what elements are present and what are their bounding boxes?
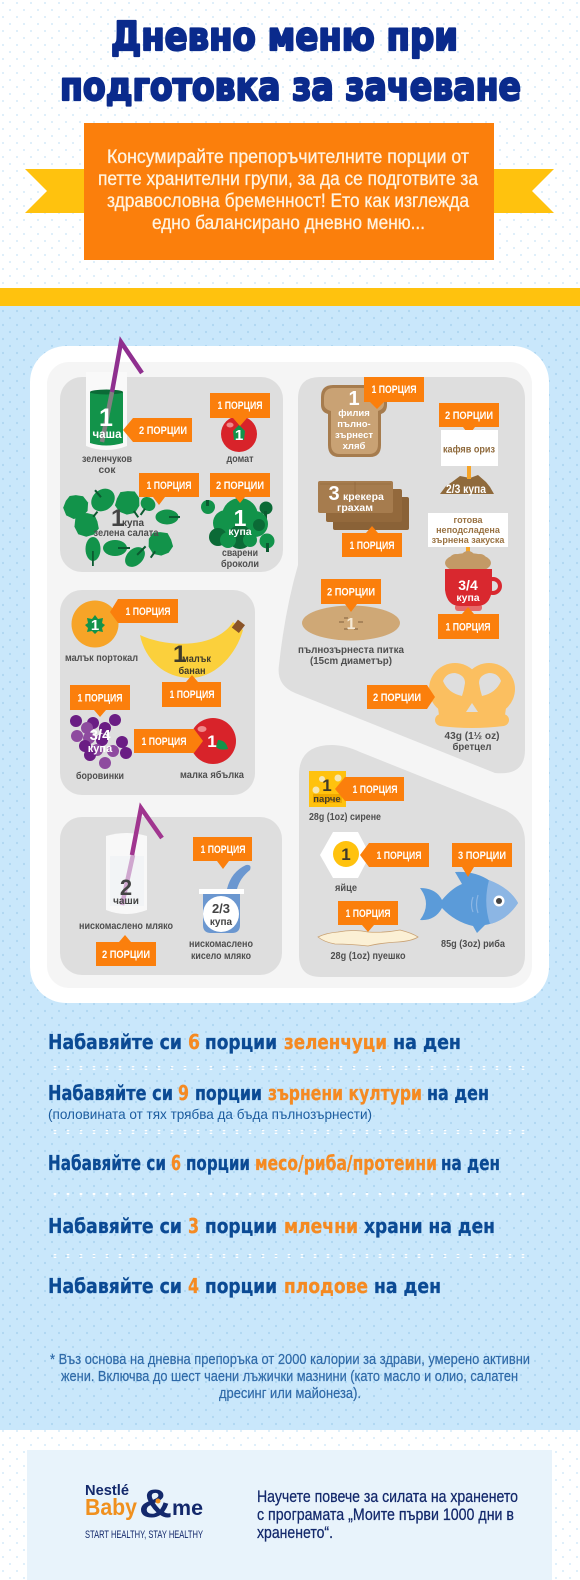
label: small apple: малка ябълка <box>180 769 244 781</box>
icon: cheese slice <box>309 771 346 807</box>
row: fruit: порции <box>205 1274 277 1298</box>
row: fruit: 4 <box>188 1274 199 1298</box>
icon: cereal cup: купа <box>456 592 480 604</box>
row: fruit <box>48 1274 441 1298</box>
icon: apple: 1 <box>207 732 217 751</box>
icon: graham crackers: 3 <box>328 483 340 505</box>
icon: lettuce leaves: зелена салата <box>94 528 159 539</box>
icon: yogurt cup: 2/3 <box>212 901 230 916</box>
icon: bread slice: пълно- <box>337 419 371 430</box>
row: protein: порции <box>186 1151 250 1175</box>
callout: 2 portions milk: 2 ПОРЦИИ <box>102 949 150 961</box>
icon: egg <box>320 832 370 878</box>
callout: 1 portion yogurt <box>193 837 252 869</box>
row: vegetables: на ден <box>393 1030 461 1054</box>
callout: 1 portion lettuce: 1 ПОРЦИЯ <box>146 480 192 492</box>
label: fish: 85g (3oz) риба <box>441 938 505 950</box>
label: egg: яйце <box>335 883 357 894</box>
label: vegetable juice <box>82 454 132 476</box>
icon: brown rice: кафяв ориз <box>443 444 495 456</box>
icon: bread slice: зърнест <box>335 430 373 441</box>
row: grains: порции <box>195 1081 262 1105</box>
callout: 1 portion tomato: 1 ПОРЦИЯ <box>218 400 263 412</box>
icon: vegetable juice: 1 <box>99 404 113 432</box>
row: protein: Набавяйте си <box>48 1151 166 1175</box>
icon: blueberries: 3/4 <box>90 727 111 744</box>
icon: bread slice: 1 <box>348 388 360 410</box>
callout: 1 portion tomato <box>210 393 270 426</box>
callout: 1 portion egg: 1 ПОРЦИЯ <box>376 850 422 862</box>
icon: lettuce leaves <box>59 482 180 571</box>
call to action text: Научете повече за силата на храненето <box>257 1487 518 1506</box>
icon: whole-grain tortilla: 1 <box>347 616 356 633</box>
intro banner: Консумирайте препоръчителните порции от <box>107 147 469 168</box>
icon: cheese slice: парче <box>313 794 341 805</box>
call to action text: храненето“. <box>257 1523 333 1542</box>
logo: Nestlé Baby & me: START HEALTHY, STAY HEALTHY <box>85 1529 203 1541</box>
logo: Nestlé Baby & me: & <box>139 1482 172 1526</box>
row: grains: (половината от тях трябва да бъда пълнозърнести) <box>48 1106 372 1122</box>
callout: 2 portions milk <box>96 935 156 966</box>
icon: milk glass: чаши <box>113 896 139 907</box>
label: tortilla <box>298 645 404 667</box>
row: grains: 9 <box>178 1081 189 1105</box>
row: dairy: 3 <box>188 1214 199 1238</box>
icon: broccoli: купа <box>228 526 252 538</box>
row: protein: месо/риба/протеини <box>255 1151 437 1175</box>
row: vegetables: порции <box>205 1030 277 1054</box>
icon: whole-grain tortilla <box>302 606 400 640</box>
icon: cereal cup: 3/4 <box>458 577 478 593</box>
icon: orange: 1 <box>91 617 99 634</box>
icon: broccoli <box>201 498 274 552</box>
icon: graham crackers: грахам <box>337 502 373 514</box>
label: low-fat yogurt: нискомаслено <box>189 939 253 950</box>
row: dairy: храни на ден <box>364 1214 495 1238</box>
row: protein <box>48 1151 500 1175</box>
logo: Nestlé Baby & me: Nestlé <box>85 1482 129 1499</box>
icon: milk glass: 2 <box>120 875 132 900</box>
icon: lettuce leaves: купа <box>122 517 144 529</box>
icon: bread slice: хляб <box>343 441 365 452</box>
icon: broccoli: 1 <box>234 505 247 531</box>
icon: vegetable juice: чаша <box>92 429 122 441</box>
logo: Nestlé Baby & me: Baby <box>85 1494 137 1520</box>
label: broccoli: броколи <box>221 558 259 570</box>
footnote <box>50 1352 530 1402</box>
panel: vegetables <box>59 342 283 572</box>
row: dairy: млечни <box>284 1214 358 1238</box>
row: protein: 6 <box>171 1151 181 1175</box>
icon: milk glass <box>106 808 162 914</box>
call to action text: с програмата „Моите първи 1000 дни в <box>257 1505 514 1524</box>
icon: cereal cup <box>428 513 508 611</box>
callout: 2 portions tortilla <box>321 579 381 612</box>
footnote: жени. Включва до шест чаени лъжички мазнини (като масло и олио, салатен <box>61 1369 518 1385</box>
callout: 1 portion crackers: 1 ПОРЦИЯ <box>350 540 395 552</box>
icon: cereal cup: неподсладена <box>436 525 501 535</box>
intro banner: петте хранителни групи, за да се подготвите за <box>98 169 478 190</box>
row: protein: на ден <box>441 1151 500 1175</box>
callout: 2 portions broccoli <box>210 473 270 503</box>
plate tray <box>30 342 549 1003</box>
icon: yogurt cup: купа <box>210 917 233 928</box>
row: vegetables: зеленчуци <box>284 1030 387 1054</box>
icon: brown rice <box>440 430 498 496</box>
callout: 1 portion bread <box>364 377 424 409</box>
label: blueberries: боровинки <box>76 770 124 782</box>
callout: 2 portions pretzel <box>367 685 435 709</box>
footnote: * Въз основа на дневна препоръка от 2000 калории за здрави, умерено активни <box>50 1352 530 1368</box>
callout: 1 portion bread: 1 ПОРЦИЯ <box>372 384 417 396</box>
icon: bread slice: филия <box>338 408 370 419</box>
icon: apple <box>190 718 236 764</box>
label: cheese: 28g (1oz) сирене <box>309 812 381 823</box>
icon: graham crackers: крекера <box>343 491 384 503</box>
label: tomato: домат <box>226 454 254 465</box>
callout: 3 portions fish: 3 ПОРЦИИ <box>458 850 506 862</box>
callout: 1 portion banana <box>162 675 221 707</box>
intro banner: едно балансирано дневно меню... <box>152 213 425 234</box>
label: low-fat milk: нискомаслено мляко <box>79 921 173 932</box>
title: Дневно меню при <box>111 15 458 60</box>
logo: Nestlé Baby & me: me <box>172 1497 203 1520</box>
icon: banana: малък <box>182 654 212 665</box>
servings summary <box>48 1030 531 1298</box>
row: grains: Набавяйте си <box>48 1081 173 1105</box>
callout: 2 portions rice <box>439 403 499 435</box>
callout: 1 portion cheese <box>335 777 404 801</box>
callout: 1 portion banana: 1 ПОРЦИЯ <box>170 689 215 701</box>
icon: egg: 1 <box>341 845 351 864</box>
callout: 1 portion cheese: 1 ПОРЦИЯ <box>352 784 398 796</box>
intro banner <box>25 123 554 260</box>
label: pretzel: бретцел <box>452 741 492 753</box>
row: grains: зърнени култури <box>268 1081 422 1105</box>
icon: orange <box>72 600 118 648</box>
icon: fish <box>420 872 518 933</box>
row: grains: на ден <box>427 1081 489 1105</box>
icon: pretzel <box>429 663 515 722</box>
panel: fruit <box>60 590 255 795</box>
icon: tomato <box>221 416 257 452</box>
label: tortilla: (15cm диаметър) <box>310 656 392 667</box>
callout: 1 portion orange <box>110 599 178 623</box>
call to action text <box>257 1487 518 1542</box>
panel: grains <box>279 377 525 773</box>
intro banner: здравословна бременност! Ето как изглежда <box>107 191 469 212</box>
callout: 1 portion yogurt: 1 ПОРЦИЯ <box>200 844 246 856</box>
row: dairy: Набавяйте си <box>48 1214 182 1238</box>
icon: vegetable juice <box>86 342 142 450</box>
callout: 2 portions juice: 2 ПОРЦИИ <box>139 425 187 437</box>
row: grains <box>48 1081 489 1122</box>
label: vegetable juice: сок <box>98 465 117 476</box>
callout: 1 portion egg <box>360 843 429 867</box>
footnote: дресинг или майонеза). <box>219 1386 361 1402</box>
panel: protein <box>299 745 525 977</box>
callout: 1 portion apple <box>134 729 203 753</box>
callout: 2 portions tortilla: 2 ПОРЦИИ <box>327 586 375 598</box>
callout: 2 portions juice <box>123 418 192 442</box>
callout: 1 portion blueberries: 1 ПОРЦИЯ <box>78 692 123 704</box>
icon: cereal cup: готова <box>453 515 484 525</box>
row: fruit: на ден <box>374 1274 441 1298</box>
label: broccoli: сварени <box>222 548 258 559</box>
icon: blueberries <box>70 714 132 769</box>
callout: 1 portion apple: 1 ПОРЦИЯ <box>142 736 187 748</box>
callout: 3 portions fish <box>452 843 512 877</box>
icon: graham crackers <box>318 481 409 530</box>
label: broccoli <box>221 548 259 570</box>
label: low-fat yogurt: кисело мляко <box>191 951 251 962</box>
icon: turkey slice <box>318 930 418 946</box>
icon: banana <box>140 620 245 678</box>
label: low-fat yogurt <box>189 939 253 962</box>
icon: tomato: 1 <box>235 427 243 444</box>
row: vegetables <box>48 1030 461 1054</box>
callout: 2 portions broccoli: 2 ПОРЦИИ <box>216 480 264 492</box>
callout: 1 portion crackers <box>342 526 402 557</box>
icon: bread slice <box>321 385 387 457</box>
callout: 1 portion turkey: 1 ПОРЦИЯ <box>346 908 391 920</box>
label: pretzel <box>444 731 500 753</box>
panel: dairy <box>60 808 282 975</box>
callout: 1 portion turkey <box>338 901 398 932</box>
icon: banana: банан <box>178 665 206 677</box>
callout: 1 portion orange: 1 ПОРЦИЯ <box>126 606 171 618</box>
label: vegetable juice: зеленчуков <box>82 454 132 465</box>
row: dairy: порции <box>205 1214 277 1238</box>
icon: yogurt cup <box>199 865 250 933</box>
footer panel <box>27 1450 552 1580</box>
icon: cheese slice: 1 <box>322 776 332 795</box>
callout: 1 portion lettuce <box>139 473 199 505</box>
callout: 1 portion cereal: 1 ПОРЦИЯ <box>446 622 491 634</box>
row: dairy <box>48 1214 495 1238</box>
callout: 1 portion cereal <box>438 607 499 639</box>
icon: cereal cup: зърнена закуска <box>432 535 505 545</box>
title <box>60 15 521 110</box>
row: fruit: плодове <box>284 1274 368 1298</box>
row: vegetables: 6 <box>188 1030 200 1054</box>
label: tortilla: пълнозърнеста питка <box>298 645 404 656</box>
icon: banana: 1 <box>173 641 186 668</box>
icon: blueberries: купа <box>88 743 113 755</box>
icon: lettuce leaves: 1 <box>111 505 124 532</box>
label: small orange: малък портокал <box>65 653 138 664</box>
callout: 2 portions pretzel: 2 ПОРЦИИ <box>373 692 421 704</box>
row: fruit: Набавяйте си <box>48 1274 182 1298</box>
row: vegetables: Набавяйте си <box>48 1030 182 1054</box>
logo: Nestlé Baby & me <box>85 1482 203 1541</box>
label: turkey: 28g (1oz) пуешко <box>330 951 406 962</box>
callout: 2 portions rice: 2 ПОРЦИИ <box>445 410 493 422</box>
callout: 1 portion blueberries <box>70 685 130 717</box>
label: pretzel: 43g (1½ oz) <box>444 731 500 742</box>
icon: brown rice: 2/3 купа <box>446 484 487 496</box>
